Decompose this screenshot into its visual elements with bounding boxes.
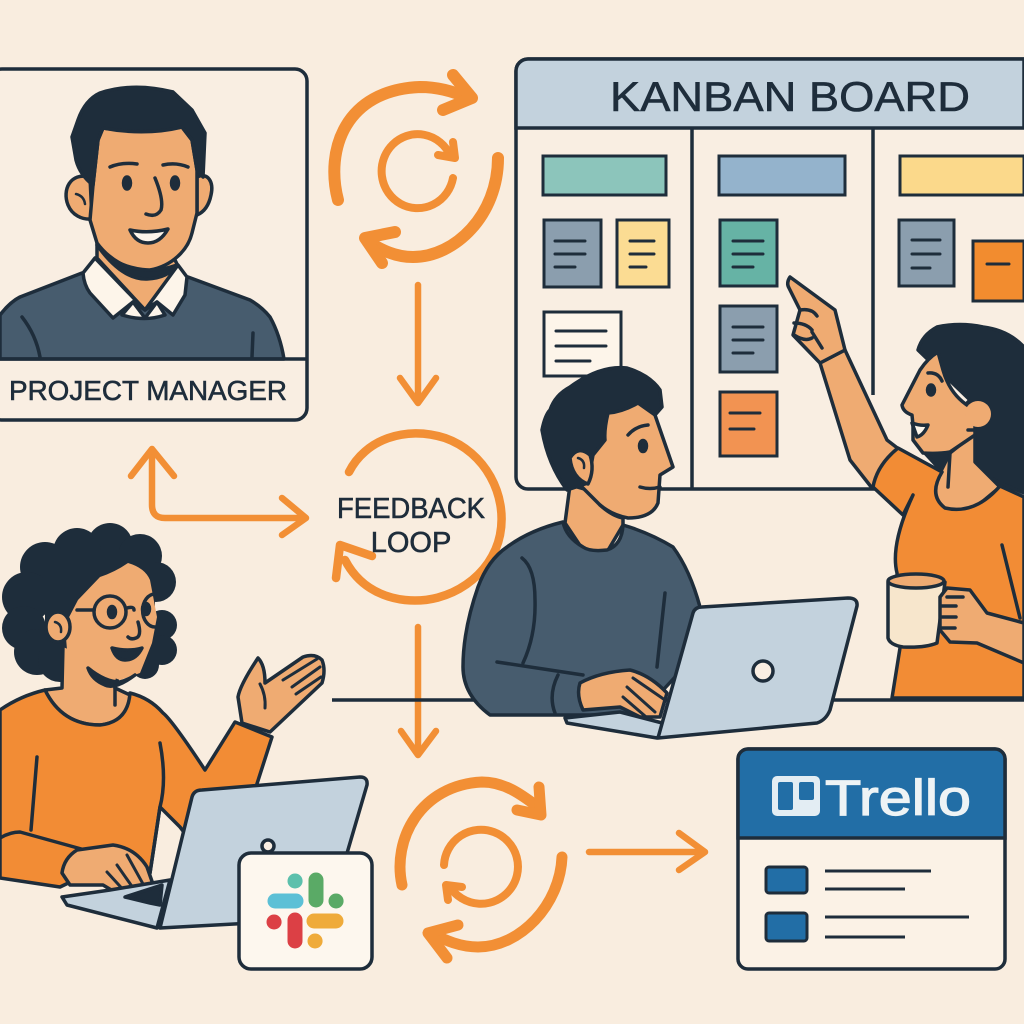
desk line [332,698,1024,702]
arrow: down to feedback loop [400,285,436,403]
kanban cards [544,220,1024,456]
arrow: double headed elbow [131,449,306,535]
panel: trello [738,749,1005,969]
trello wordmark: Trello [825,770,971,826]
kanban column headers [543,156,1024,195]
icon: trello logo [772,776,820,816]
arrow: down from feedback loop [401,627,436,755]
person: man with laptop [463,368,700,717]
panel: kanban board [516,59,1024,489]
person: woman with glasses [0,523,324,897]
icon: slack [239,853,372,969]
feedback loop: LOOP [371,527,451,559]
arrows: top cycle [334,75,498,263]
kanban heading: KANBAN BOARD [610,73,970,120]
feedback loop: FEEDBACK [337,493,486,525]
feedback loop [336,433,502,601]
arrows: bottom cycle [400,782,562,958]
coffee mug [888,578,945,647]
arrow: to trello [589,833,705,870]
laptop: man [565,598,857,738]
project manager label: PROJECT MANAGER [9,375,287,406]
laptop: woman [62,777,367,928]
trello list rows [766,867,969,941]
person: woman pointing [788,277,1024,698]
panel: project manager [0,69,307,420]
hair [2,523,177,682]
project manager portrait [0,87,284,359]
